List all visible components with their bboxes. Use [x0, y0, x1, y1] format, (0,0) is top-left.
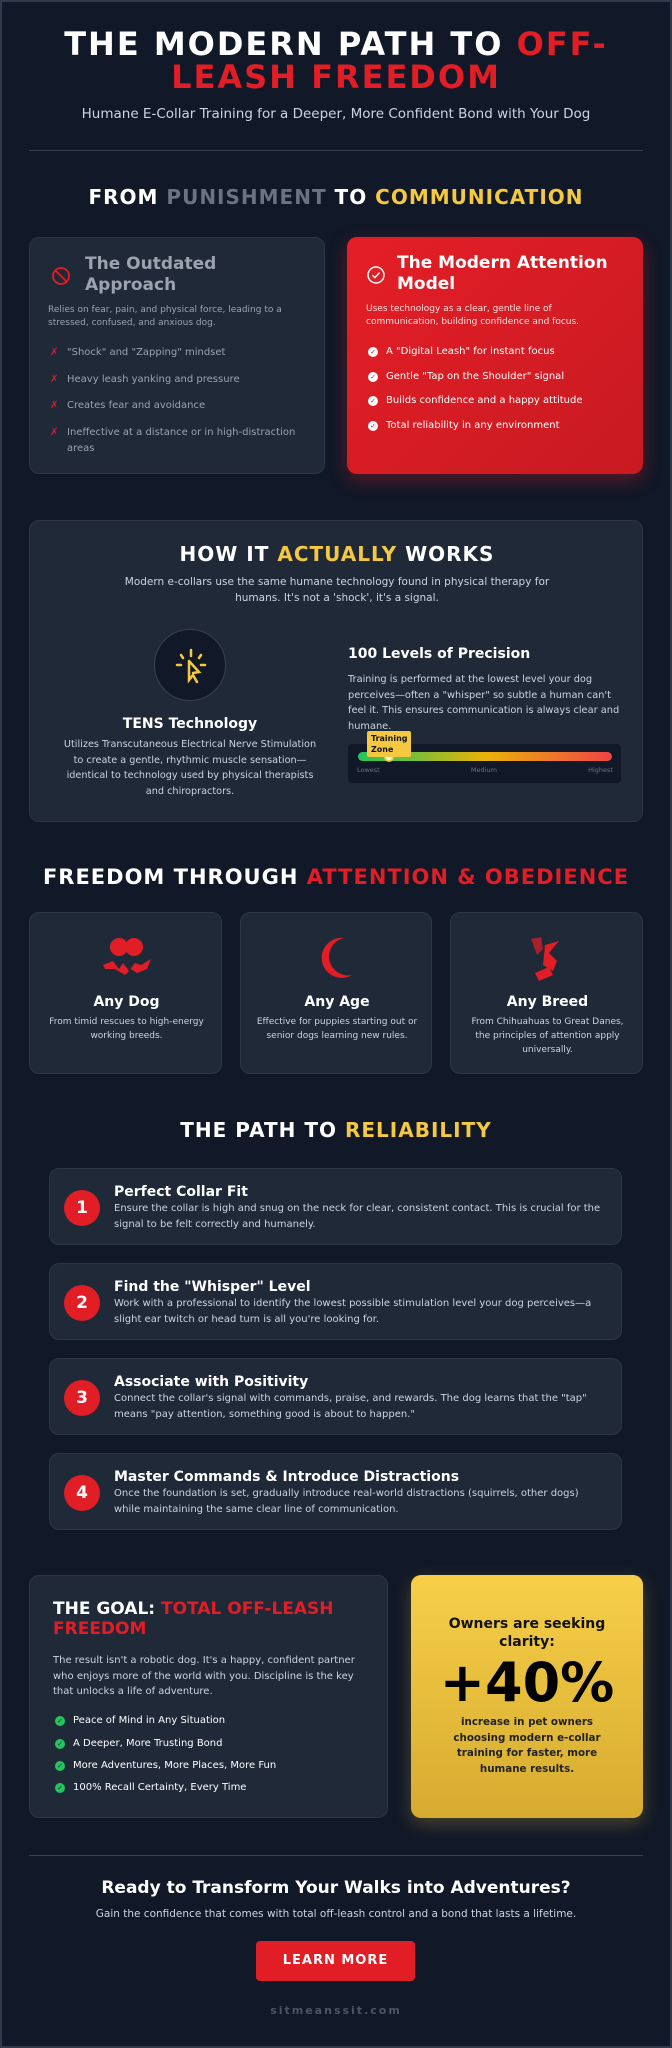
stat callout: +40%: [440, 1651, 614, 1714]
icon: moon: [322, 938, 352, 978]
card: any breed: From Chihuahuas to Great Danes, the principles of attention apply universally.: [471, 1017, 624, 1055]
heading: freedom: FREEDOM THROUGH ATTENTION & OBEDIENCE: [43, 865, 629, 889]
panel title: The Outdated: [85, 254, 216, 274]
list: outdated: Heavy leash yanking and pressure: [67, 374, 240, 385]
card: any age: [240, 912, 432, 1074]
list: modern: ✓: [370, 348, 376, 356]
precision text: [348, 646, 619, 732]
list: modern: Builds confidence and a happy attitude: [386, 395, 582, 406]
list: modern: Total reliability in any environment: [386, 420, 560, 431]
step 4: Once the foundation is set, gradually introduce real-world distractions (squirrels, other dogs) while maintaining the same clear line of communication.: [114, 1488, 579, 1515]
precision text: 100 Levels of Precision: [348, 646, 530, 662]
stat callout: clarity:: [499, 1634, 555, 1650]
heading: path to reliability: THE PATH TO RELIABILITY: [180, 1118, 492, 1142]
list: outdated: Ineffective at a distance or in high-distraction areas: [67, 427, 295, 454]
list: outdated: ✗: [50, 374, 58, 385]
list: outdated: ✗: [50, 400, 58, 411]
list: modern: ✓: [370, 422, 376, 430]
step 2: [49, 1263, 622, 1340]
chart: intensity scale: [348, 744, 621, 783]
card: any dog: Any Dog: [93, 994, 160, 1010]
list: outdated: ✗: [50, 427, 58, 438]
list: outdated: "Shock" and "Zapping" mindset: [67, 347, 225, 358]
icon: tens pointer: [154, 629, 226, 701]
footer: sitmeanssit.com: [270, 2004, 402, 2017]
chart: intensity scale: Highest: [588, 766, 613, 774]
description: Relies on fear, pain, and physical force, leading to a stressed, confused, and anxious dog.: [48, 305, 282, 328]
step 4: Master Commands & Introduce Distractions: [114, 1469, 459, 1485]
panel title: [397, 253, 608, 294]
icon: check circle: [367, 266, 385, 284]
step 2: 2: [76, 1293, 88, 1313]
step 3: 3: [76, 1388, 88, 1408]
step 3: Associate with Positivity: [114, 1374, 308, 1390]
icon: breed: [531, 937, 559, 981]
tens text: TENS Technology: [123, 716, 257, 732]
precision text: Training is performed at the lowest level your dog perceives—often a "whisper" so subtle a human can't feel it. This ensures communication is always clear and humane.: [348, 674, 619, 732]
title: [64, 25, 608, 96]
step 3: [49, 1358, 622, 1435]
subtitle: Humane E-Collar Training for a Deeper, More Confident Bond with Your Dog: [82, 106, 590, 122]
chart: intensity scale: Medium: [471, 766, 497, 774]
panel: modern attention model: [347, 237, 643, 474]
training zone tag: Training Zone: [371, 734, 408, 754]
cta subtext: Gain the confidence that comes with total off-leash control and a bond that lasts a lifetime.: [96, 1908, 576, 1920]
step 1: Perfect Collar Fit: [114, 1184, 248, 1200]
card: any breed: Any Breed: [507, 994, 588, 1010]
panel: the goal: The result isn't a robotic dog. It's a happy, confident partner who enjoys more of the world with you. Discipline is the key that unlocks a life of adventure.: [53, 1655, 355, 1697]
heading: from punishment to communication: FROM PUNISHMENT TO COMMUNICATION: [88, 185, 584, 209]
stat callout: Owners are seeking: [449, 1616, 605, 1632]
list: benefits: ✓: [57, 1784, 63, 1792]
panel title: [85, 254, 216, 295]
list: benefits: Peace of Mind in Any Situation: [73, 1715, 225, 1726]
button: learn more: [256, 1941, 415, 1981]
list: benefits: A Deeper, More Trusting Bond: [73, 1738, 222, 1748]
list: outdated: Creates fear and avoidance: [67, 400, 205, 411]
list: benefits: More Adventures, More Places, More Fun: [73, 1760, 276, 1770]
panel: the goal: FREEDOM: [53, 1619, 146, 1639]
intro text: Modern e-collars use the same humane technology found in physical therapy for humans. It's not a 'shock', it's a signal.: [125, 576, 549, 604]
step 1: 1: [76, 1198, 88, 1218]
list: modern: ✓: [370, 397, 376, 405]
description: Uses technology as a clear, gentle line of communication, building confidence and focus.: [366, 304, 579, 327]
list: benefits: ✓: [57, 1762, 63, 1770]
list: benefits: [55, 1715, 276, 1793]
step 2: Find the "Whisper" Level: [114, 1279, 311, 1295]
panel title: The Modern Attention: [397, 253, 608, 273]
chart: intensity scale: Lowest: [357, 766, 380, 774]
list: benefits: ✓: [57, 1717, 63, 1725]
icon: ban: [52, 267, 70, 285]
panel title: Model: [397, 274, 455, 294]
list: benefits: ✓: [57, 1740, 63, 1748]
list: modern: Gentle "Tap on the Shoulder" signal: [386, 371, 564, 382]
stat callout: [411, 1575, 643, 1818]
title: THE MODERN PATH TO OFF-: [64, 25, 608, 63]
list: outdated: [50, 347, 295, 454]
stat callout: increase in pet owners choosing modern e-collar training for faster, more humane results.: [453, 1716, 601, 1775]
card: any breed: [450, 912, 643, 1074]
panel: how it works: [29, 520, 643, 822]
cta heading: Ready to Transform Your Walks into Adventures?: [101, 1878, 571, 1898]
title: LEASH FREEDOM: [171, 58, 501, 96]
icon: dogs: [103, 938, 151, 975]
list: benefits: 100% Recall Certainty, Every Time: [73, 1782, 246, 1792]
card: any dog: From timid rescues to high-energy working breeds.: [49, 1017, 204, 1041]
list: modern: ✓: [370, 373, 376, 381]
card: any age: Effective for puppies starting out or senior dogs learning new rules.: [257, 1017, 417, 1041]
list: modern: [368, 346, 582, 431]
step 3: Connect the collar's signal with commands, praise, and rewards. The dog learns that the "tap" means "pay attention, something good is about to happen.": [114, 1393, 587, 1420]
step 4: 4: [76, 1483, 88, 1503]
panel: the goal: THE GOAL: TOTAL OFF-LEASH: [53, 1599, 334, 1619]
panel: the goal: [29, 1575, 388, 1818]
tens text: Utilizes Transcutaneous Electrical Nerve Stimulation to create a gentle, rhythmic muscle sensation—identical to technology used by physical therapists and chiropractors.: [64, 739, 316, 797]
heading: HOW IT ACTUALLY WORKS: [180, 542, 494, 566]
training zone tag: [367, 731, 411, 757]
list: modern: A "Digital Leash" for instant focus: [386, 346, 555, 357]
step 4: [49, 1453, 622, 1530]
card: any dog: [29, 912, 222, 1074]
panel title: Approach: [85, 275, 176, 295]
button: learn more: LEARN MORE: [283, 1953, 388, 1968]
panel: outdated approach: [29, 237, 325, 474]
step 1: Ensure the collar is high and snug on the neck for clear, consistent contact. This is crucial for the signal to be felt correctly and humanely.: [114, 1203, 600, 1230]
step 2: Work with a professional to identify the lowest possible stimulation level your dog perceives—a slight ear twitch or head turn is all you're looking for.: [114, 1298, 591, 1325]
step 1: [49, 1168, 622, 1245]
list: outdated: ✗: [50, 347, 58, 358]
card: any age: Any Age: [304, 994, 370, 1010]
